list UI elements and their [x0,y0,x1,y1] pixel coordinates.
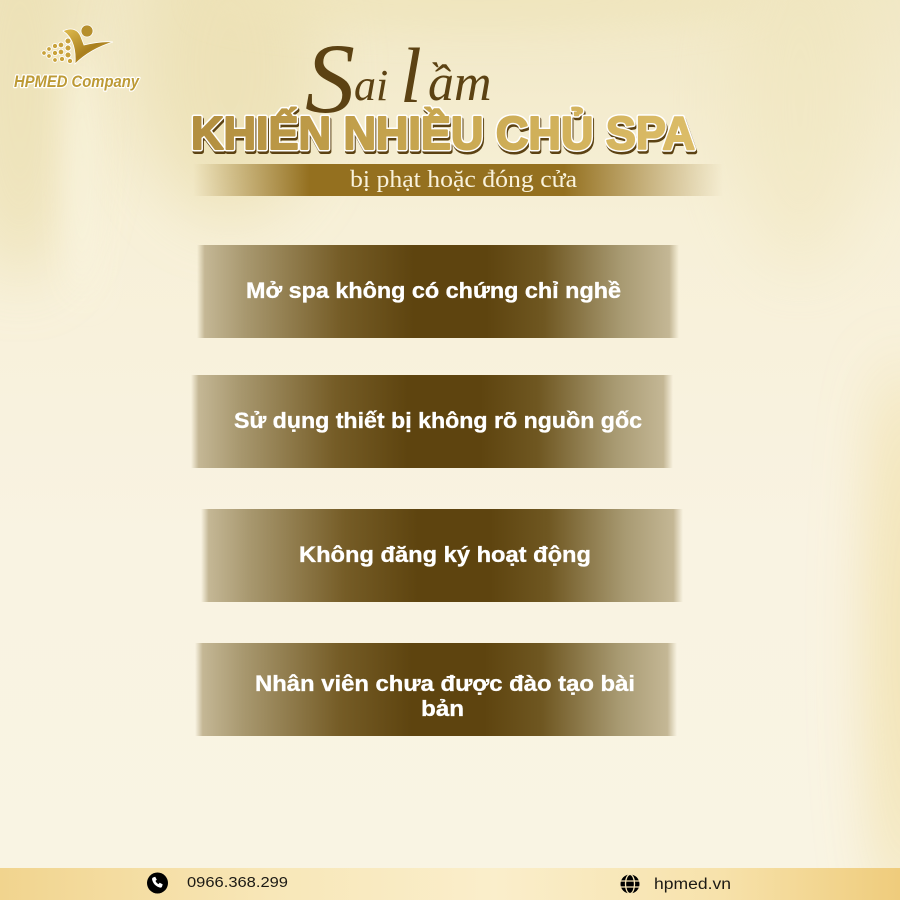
icon: globe [620,874,640,894]
title main: KHIẾN NHIỀU CHỦ SPA: KHIẾN NHIỀU CHỦ SPA [191,107,695,159]
panel: mistake 3: Không đăng ký hoạt động [299,542,591,567]
title script: Sai lầm: ai [354,61,399,110]
logo [14,25,140,91]
logo dots [42,38,73,64]
title main: KHIẾN NHIỀU CHỦ SPA: KHIẾN NHIỀU CHỦ SPA [191,107,695,159]
panel: mistake 4 [195,643,677,736]
subtitle band: bị phạt hoặc đóng cửa [350,167,577,193]
panel: mistake 1 [197,245,679,338]
panel: mistake 2 [191,375,673,468]
subtitle band [193,164,723,196]
logo figure [63,25,113,64]
footer bar [0,868,900,900]
logo wordmark: HPMED Company [14,72,140,91]
title script: Sai lầm: ầm [428,55,492,112]
title [191,23,696,162]
title script: Sai lầm: S [305,23,355,134]
phone number: 0966.368.299 [187,874,288,891]
panel: mistake 2: Sử dụng thiết bị không rõ nguồn gốc [234,408,642,433]
panel: mistake 1: Mở spa không có chứng chỉ nghề [246,278,621,303]
website: hpmed.vn [654,876,731,893]
panel: mistake 3 [201,509,683,602]
panel: mistake 4: bản [421,696,464,721]
title script: Sai lầm: l [400,32,422,119]
panel: mistake 4: Nhân viên chưa được đào tạo bài [255,671,635,696]
icon: phone [147,872,168,894]
title main: KHIẾN NHIỀU CHỦ SPA: KHIẾN NHIỀU CHỦ SPA [192,110,696,162]
